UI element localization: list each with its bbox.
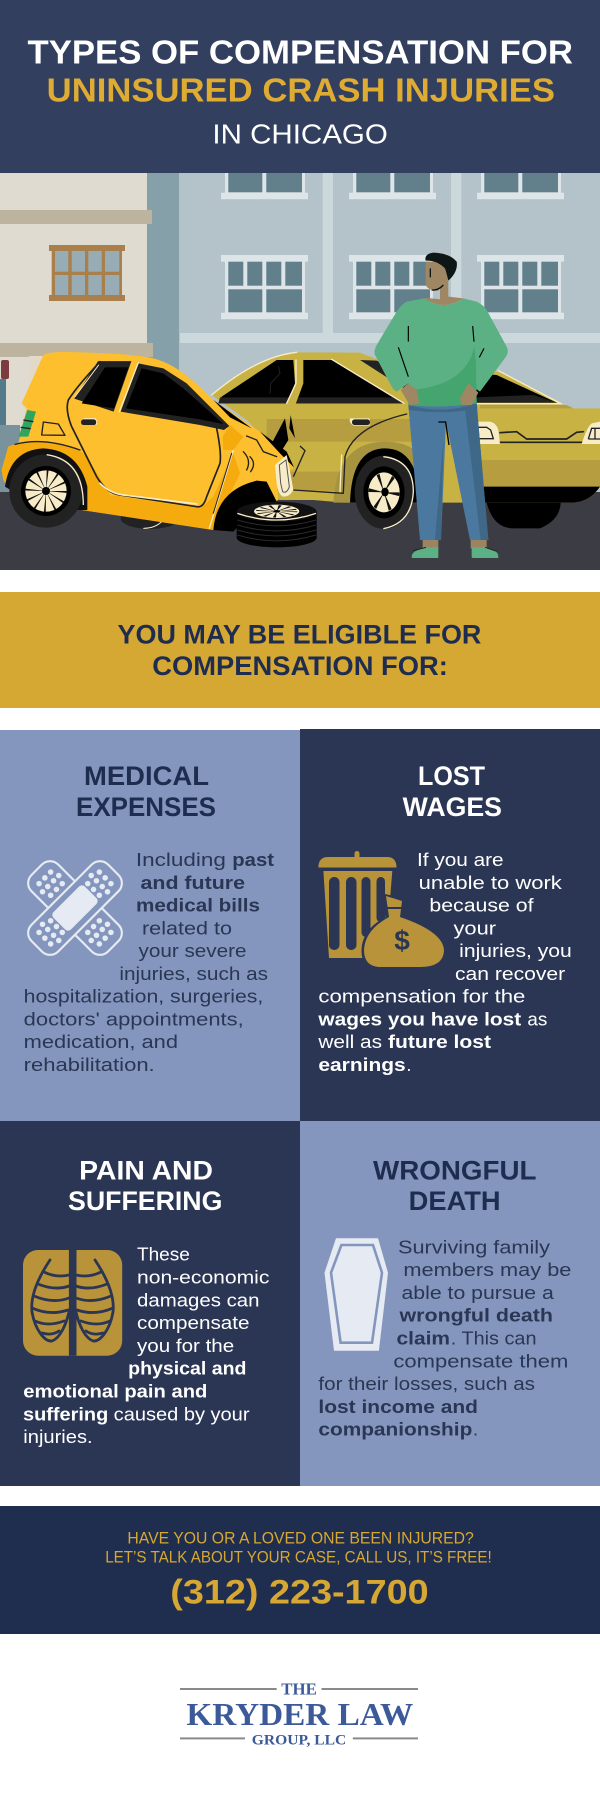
text: medical expenses: related to — [142, 918, 232, 938]
heading: lost wages — [403, 761, 502, 822]
header panel — [0, 0, 600, 173]
head — [424, 253, 463, 305]
text: medical expenses: rehabilitation. — [24, 1055, 155, 1075]
heading: pain and suffering — [68, 1156, 222, 1216]
heading: wrongful death: WRONGFUL — [373, 1156, 536, 1186]
logo: The Kryder Law Group, LLC: GROUP, LLC — [252, 1733, 346, 1749]
text: wrongful death: able to pursue a — [402, 1283, 555, 1303]
eligibility banner: YOU MAY BE ELIGIBLE FOR — [118, 620, 481, 650]
illustration: street crash scene — [0, 173, 600, 570]
text: pain and suffering: damages can — [137, 1290, 260, 1310]
text: wrongful death: . This can — [451, 1328, 536, 1348]
text: pain and suffering: suffering — [23, 1404, 108, 1424]
text: lost wages: injuries, you — [459, 941, 572, 961]
heading: medical expenses: EXPENSES — [76, 792, 216, 822]
text: wrongful death: companionship — [318, 1420, 472, 1440]
icon: trash can and money bag — [318, 851, 445, 968]
text: wrongful death: Surviving family — [398, 1237, 551, 1257]
yellow car — [2, 352, 317, 547]
logo: The Kryder Law Group, LLC: KRYDER LAW — [186, 1696, 413, 1732]
text: pain and suffering: These — [137, 1245, 190, 1265]
text: pain and suffering: caused by your — [114, 1404, 250, 1424]
tan building window — [49, 245, 125, 301]
title: TYPES OF COMPENSATION FOR — [28, 35, 573, 72]
text: wrongful death: lost income and — [318, 1397, 478, 1417]
text: medical expenses: doctors' appointments, — [24, 1009, 244, 1029]
text: lost wages: as — [527, 1009, 547, 1029]
text: wrongful death: members may be — [403, 1260, 571, 1280]
icon: coffin — [324, 1238, 388, 1351]
panel: pain and suffering — [0, 1121, 300, 1486]
text: pain and suffering: physical and — [128, 1359, 246, 1379]
icon: trash can and money bag: $ — [394, 925, 410, 956]
text: pain and suffering: non-economic — [137, 1268, 269, 1288]
text: medical expenses: and future — [140, 873, 245, 893]
text: lost wages — [317, 850, 572, 1075]
text: wrongful death: claim — [396, 1328, 450, 1348]
heading: wrongful death — [373, 1156, 536, 1216]
text: lost wages: because of — [429, 896, 535, 916]
logo: The Kryder Law Group, LLC — [180, 1680, 418, 1749]
text: lost wages: can recover — [455, 964, 565, 984]
buildings background — [0, 173, 600, 493]
heading: lost wages: LOST — [418, 761, 485, 791]
title — [28, 35, 573, 150]
heading: medical expenses: MEDICAL — [84, 761, 209, 791]
text: wrongful death: for their losses, such as — [318, 1374, 535, 1394]
road — [0, 492, 600, 570]
text: medical expenses — [24, 850, 274, 1075]
man standing — [374, 253, 508, 558]
panel: wrongful death — [300, 1121, 600, 1486]
text: wrongful death: compensate them — [393, 1351, 568, 1371]
text: lost wages: wages you have lost — [317, 1009, 521, 1029]
text: lost wages: If you are — [417, 850, 504, 870]
text: medical expenses: Including — [136, 850, 226, 870]
phone number: (312) 223-1700 — [170, 1573, 429, 1611]
gold car — [212, 352, 600, 529]
call to action text — [105, 1529, 492, 1566]
text: pain and suffering: emotional pain and — [23, 1382, 207, 1402]
icon: crossed bandages — [23, 856, 127, 960]
text: lost wages: compensation for the — [318, 986, 525, 1006]
text: wrongful death: . — [473, 1420, 478, 1440]
text: wrongful death — [318, 1237, 571, 1440]
eligibility banner — [0, 592, 600, 708]
heading: pain and suffering: PAIN AND — [79, 1156, 213, 1186]
logo: The Kryder Law Group, LLC: THE — [281, 1680, 317, 1699]
text: medical expenses: medication, and — [24, 1032, 178, 1052]
heading: pain and suffering: SUFFERING — [68, 1186, 222, 1216]
text: lost wages: your — [454, 918, 496, 938]
text: medical expenses: medical bills — [136, 896, 260, 916]
text: pain and suffering — [23, 1245, 269, 1447]
icon: rib cage — [23, 1250, 122, 1356]
heading: wrongful death: DEATH — [409, 1186, 501, 1216]
text: lost wages: future lost — [388, 1032, 491, 1052]
text: lost wages: well as — [317, 1032, 382, 1052]
heading: medical expenses — [76, 761, 216, 822]
grey building windows — [221, 173, 564, 319]
panel: lost wages — [300, 729, 600, 1121]
text: medical expenses: hospitalization, surgeries, — [24, 986, 263, 1006]
spare tire — [237, 502, 317, 547]
eligibility banner: COMPENSATION FOR: — [152, 651, 448, 681]
title: UNINSURED CRASH INJURIES — [47, 73, 555, 110]
call to action text: HAVE YOU OR A LOVED ONE BEEN INJURED? — [127, 1529, 474, 1547]
text: medical expenses: injuries, such as — [119, 964, 268, 984]
text: pain and suffering: compensate — [137, 1313, 250, 1333]
text: lost wages: . — [406, 1055, 411, 1075]
text: medical expenses: your severe — [138, 941, 246, 961]
text: lost wages: unable to work — [419, 873, 563, 893]
call to action text: LET’S TALK ABOUT YOUR CASE, CALL US, IT’S FREE! — [105, 1548, 492, 1566]
text: pain and suffering: injuries. — [23, 1427, 93, 1447]
text: pain and suffering: you for the — [137, 1336, 234, 1356]
title: IN CHICAGO — [212, 118, 388, 150]
text: medical expenses: past — [232, 850, 274, 870]
text: lost wages: earnings — [318, 1055, 406, 1075]
text: wrongful death: wrongful death — [398, 1306, 553, 1326]
panel: medical expenses — [0, 730, 300, 1121]
heading: lost wages: WAGES — [403, 792, 502, 822]
call to action banner — [0, 1506, 600, 1634]
